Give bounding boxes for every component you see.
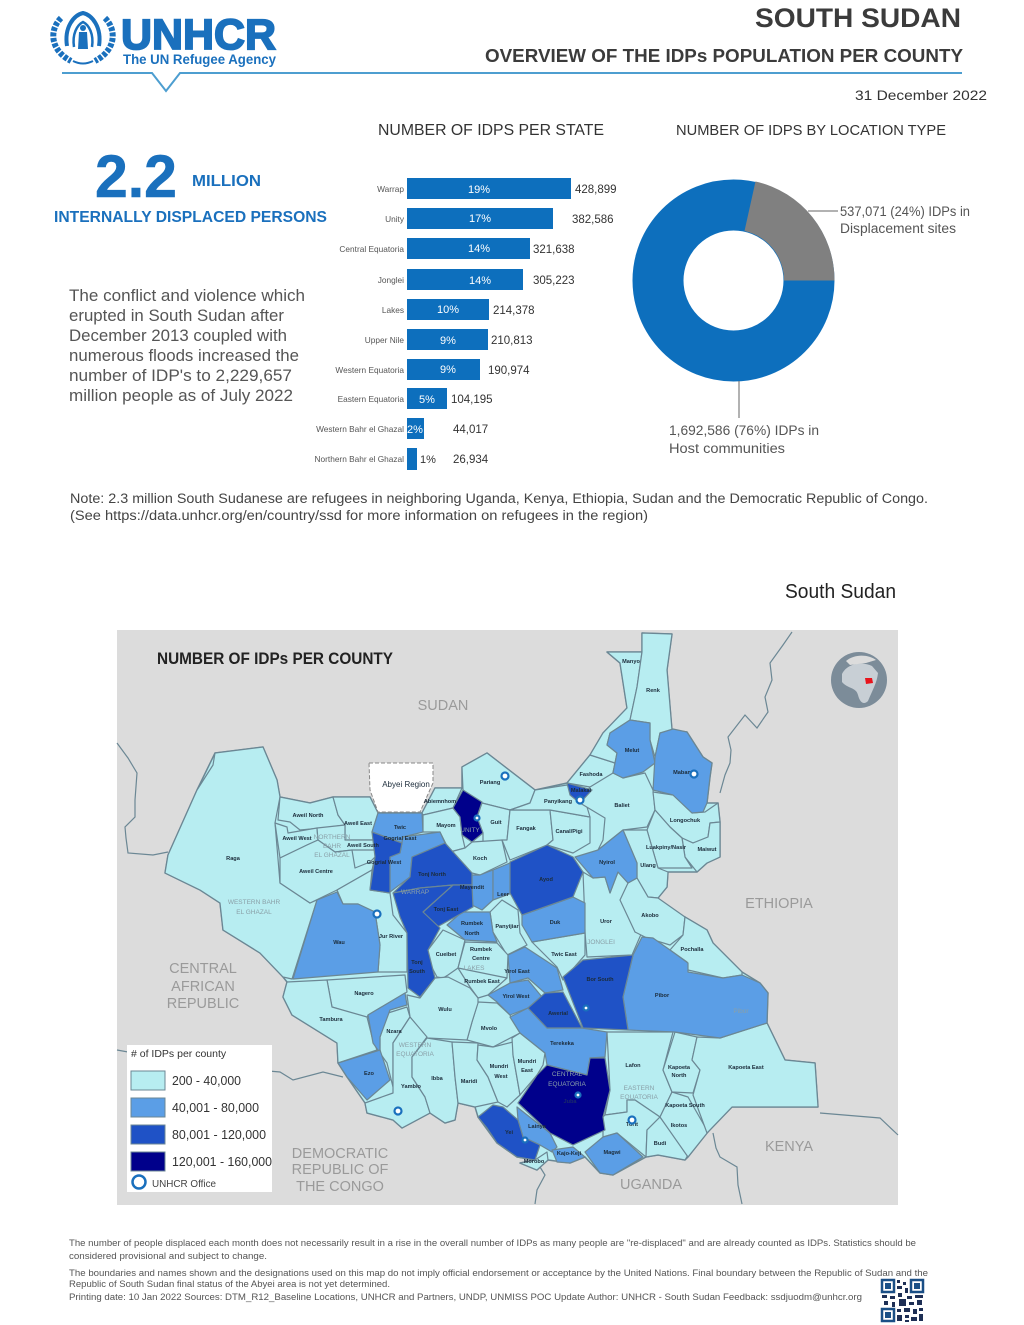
bar chart: IDPs per state: Unity: [385, 214, 405, 224]
title: South Sudan: SOUTH SUDAN: [755, 3, 961, 33]
note: refugees: (See https://data.unhcr.org/en/country/ssd for more information on refugees in the region): [70, 508, 648, 523]
note: refugees: Note: 2.3 million South Sudanese are refugees in neighboring Uganda, Kenya, Ethiopia, Sudan and the Democratic Republic of Congo.: [70, 491, 928, 506]
text block: context paragraph: The conflict and violence which: [69, 287, 305, 305]
county labels: Kapoeta: [668, 1065, 691, 1071]
footer disclaimer: considered provisional and subject to change.: [69, 1251, 267, 1261]
bar chart: IDPs per state: Upper Nile: [365, 335, 404, 345]
county labels: Aweil South: [347, 843, 380, 849]
state labels: LAKES: [464, 965, 485, 972]
county labels: Rumbek: [461, 921, 484, 927]
county labels: Tonj East: [434, 907, 459, 913]
county labels: Ulang: [640, 863, 656, 869]
county labels: Bor South: [586, 977, 614, 983]
county labels: Ikotos: [671, 1123, 687, 1129]
bar chart: IDPs per state: 14%: [469, 275, 491, 287]
text block: context paragraph: million people as of July 2022: [69, 387, 293, 405]
county labels: Twic East: [551, 952, 577, 958]
county labels: Gogrial East: [384, 836, 417, 842]
county labels: Kapoeta South: [665, 1103, 705, 1109]
text block: context paragraph: numerous floods increased the: [69, 347, 299, 365]
county labels: Rumbek East: [464, 979, 500, 985]
state labels: EQUATORIA: [548, 1081, 587, 1088]
map title: NUMBER OF IDPs PER COUNTY: [157, 649, 394, 668]
logo wordmark: UNHCR: [121, 11, 276, 59]
state labels: UNITY: [460, 827, 480, 834]
county labels: Luakpiny/Nasir: [646, 845, 687, 851]
county labels: Aweil North: [293, 813, 324, 819]
county labels: Tambura: [319, 1017, 343, 1023]
note: refugees: [70, 491, 928, 523]
county labels: Canal/Pigi: [555, 829, 583, 835]
county labels: North: [672, 1073, 687, 1079]
date: 31 December 2022: [855, 87, 987, 103]
county labels: Akobo: [641, 913, 659, 919]
county labels: Mayom: [436, 823, 456, 829]
county labels: Duk: [550, 920, 561, 926]
bar chart: IDPs per state: 104,195: [451, 394, 493, 406]
logo tagline: The UN Refugee Agency: [123, 52, 276, 67]
county labels: Pariang: [480, 780, 501, 786]
county labels: Terekeka: [550, 1041, 575, 1047]
county labels: Aweil Centre: [299, 869, 333, 875]
county labels: Twic: [394, 825, 406, 831]
county labels: North: [465, 931, 480, 937]
state labels: JONGLEI: [587, 939, 615, 946]
county labels: Lafon: [625, 1063, 641, 1069]
bar chart: IDPs per state: 190,974: [488, 365, 530, 377]
Abyei region: [369, 763, 433, 812]
legend labels: 200 - 40,000: [172, 1074, 241, 1088]
state labels: CENTRAL: [552, 1071, 583, 1078]
legend title: # of IDPs per county: [131, 1048, 227, 1060]
map caption: South Sudan: [785, 581, 896, 603]
county labels: Guit: [490, 820, 502, 826]
county labels: Panyikang: [544, 799, 573, 805]
county labels: Ibba: [431, 1076, 444, 1082]
text block: context paragraph: number of IDP's to 2,229,657: [69, 367, 292, 385]
bar chart: IDPs per state: 210,813: [491, 335, 533, 347]
legend labels: 80,001 - 120,000: [172, 1128, 266, 1142]
legend: [127, 1045, 272, 1192]
UNHCR office markers: [374, 770, 698, 1142]
million label: MILLION: [192, 173, 261, 190]
county labels: South: [409, 969, 425, 975]
country labels: DEMOCRATIC: [292, 1146, 388, 1162]
bar chart: IDPs per state: 305,223: [533, 275, 575, 287]
bar chart: IDPs per state: 14%: [468, 243, 490, 255]
callout: host communities: 1,692,586 (76%) IDPs in: [669, 423, 819, 438]
county labels: Fangak: [516, 826, 537, 832]
county labels: Kapoeta East: [728, 1065, 764, 1071]
county labels: Maiwut: [698, 847, 717, 853]
bar chart: IDPs per state: Lakes: [382, 305, 404, 315]
bar chart: IDPs per state: 10%: [437, 304, 459, 316]
bar chart: IDPs per state: 9%: [440, 335, 456, 347]
county labels: Nzara: [386, 1029, 402, 1035]
county labels: Yei: [505, 1130, 513, 1136]
state labels: WESTERN BAHR: [228, 899, 280, 906]
county labels: Jur River: [379, 934, 404, 940]
legend labels: [172, 1074, 272, 1169]
text block: context paragraph: [69, 287, 305, 405]
county labels: Raga: [226, 856, 241, 862]
state labels: WARRAP: [401, 889, 429, 896]
international borders: [117, 632, 898, 1204]
county labels: Maridi: [461, 1079, 478, 1085]
darkest counties: 120,001 - 160,000: [453, 790, 610, 1145]
county labels: Mvolo: [481, 1026, 498, 1032]
panel: map of IDPs per county: [117, 630, 898, 1205]
bar chart: IDPs per state: 214,378: [493, 305, 535, 317]
country labels: UGANDA: [620, 1177, 682, 1193]
footer disclaimer: Republic of South Sudan final status of the Abyei area is not yet determined.: [69, 1279, 390, 1289]
heading: IDPs by location type: NUMBER OF IDPS BY LOCATION TYPE: [676, 123, 946, 139]
country labels: CENTRAL: [169, 961, 237, 977]
county labels: West: [494, 1074, 508, 1080]
big number: 2.2: [95, 143, 177, 210]
text block: context paragraph: December 2013 coupled with: [69, 327, 287, 345]
bar chart: IDPs per state: Western Bahr el Ghazal: [316, 424, 404, 434]
county labels: Rumbek: [470, 947, 493, 953]
county labels: Gogrial West: [367, 860, 401, 866]
callout: displacement sites: 537,071 (24%) IDPs in: [840, 204, 970, 219]
country labels: THE CONGO: [296, 1179, 384, 1195]
county labels: Tonj: [411, 960, 423, 966]
county labels: Nyirol: [599, 860, 615, 866]
state labels: EQUATORIA: [620, 1094, 659, 1101]
map background: [117, 630, 898, 1205]
bar chart: IDPs per state: 19%: [468, 184, 490, 196]
text block: context paragraph: erupted in South Sudan after: [69, 307, 285, 325]
heading: IDPs per state: NUMBER OF IDPS PER STATE: [378, 122, 604, 139]
bar chart: IDPs per state: Northern Bahr el Ghazal: [315, 454, 404, 464]
county labels: Manyo: [622, 659, 640, 665]
bar chart: IDPs per state: Warrap: [377, 184, 404, 194]
county labels: Lainya: [528, 1124, 547, 1130]
state labels: EL GHAZAL: [236, 909, 272, 916]
subtitle: OVERVIEW OF THE IDPs POPULATION PER COUNTY: [485, 46, 963, 66]
country labels: SUDAN: [418, 698, 468, 714]
state labels: EQUATORIA: [396, 1051, 435, 1058]
icon: globe locator: [831, 652, 887, 708]
bar chart: IDPs per state: 1%: [420, 454, 436, 466]
bar chart: IDPs per state: 5%: [419, 394, 435, 406]
county labels: Yirol East: [504, 969, 530, 975]
county labels: Yirol West: [502, 994, 530, 1000]
county labels: Wau: [333, 940, 345, 946]
county labels: Panyijiar: [495, 924, 519, 930]
bar chart: IDPs per state: Eastern Equatoria: [338, 394, 404, 404]
callout: host communities: [669, 423, 819, 456]
state labels: WESTERN: [399, 1042, 432, 1049]
county labels: Pochalla: [680, 947, 704, 953]
dark counties: 80,001 - 120,000: [370, 783, 633, 1160]
county labels: Aweil West: [282, 836, 312, 842]
county labels: Centre: [472, 956, 490, 962]
country labels: ETHIOPIA: [745, 896, 813, 912]
subheading: INTERNALLY DISPLACED PERSONS: [54, 209, 327, 226]
bar chart: IDPs per state: Central Equatoria: [339, 244, 404, 254]
country labels: [167, 698, 813, 1195]
bar chart: IDPs per state: Western Equatoria: [335, 365, 404, 375]
county labels: Cueibet: [436, 952, 456, 958]
county labels: Mundri: [490, 1064, 509, 1070]
county labels: Maban: [673, 770, 691, 776]
header: UNHCR logo: [53, 11, 276, 67]
mid counties: 40,001 - 80,000: [293, 720, 768, 1175]
bar chart: IDPs per state: 26,934: [453, 454, 489, 466]
county labels: Tonj North: [418, 872, 447, 878]
South Sudan silhouette: [165, 633, 818, 1175]
county labels: Aweil East: [344, 821, 372, 827]
county labels: East: [521, 1068, 533, 1074]
country labels: REPUBLIC: [167, 996, 239, 1012]
county labels: Kajo-Keji: [557, 1151, 582, 1157]
counties: [165, 633, 818, 1175]
county labels: Morobo: [524, 1159, 545, 1165]
state labels: Pibor: [733, 1008, 749, 1015]
country labels: AFRICAN: [171, 979, 235, 995]
callout: displacement sites: Displacement sites: [840, 221, 956, 236]
county labels: Uror: [600, 919, 613, 925]
bar chart: IDPs per state: 9%: [440, 364, 456, 376]
county labels: Mundri: [518, 1059, 537, 1065]
county labels: [226, 659, 764, 1165]
county labels: Koch: [473, 856, 488, 862]
county labels: Leer: [497, 892, 510, 898]
header rule with notch: [62, 73, 962, 91]
light counties: 200 - 40,000: [165, 633, 818, 1170]
county labels: Torit: [626, 1122, 638, 1128]
bar chart: IDPs per state: Jonglei: [378, 275, 404, 285]
bar chart: IDPs per state: 2%: [407, 424, 423, 436]
footer disclaimer: [69, 1238, 928, 1302]
legend: UNHCR office: [132, 1176, 216, 1190]
county labels: Awerial: [548, 1011, 568, 1017]
icon: UNHCR emblem: [53, 13, 113, 64]
bar chart: IDPs per state: 321,638: [533, 244, 575, 256]
county labels: Abiemnhom: [424, 799, 456, 805]
state labels: EL GHAZAL: [314, 852, 350, 859]
state labels: NORTHERN: [314, 834, 351, 841]
bar chart: IDPs per state: 44,017: [453, 424, 488, 436]
state labels: EASTERN: [624, 1085, 655, 1092]
county labels: Budi: [654, 1141, 667, 1147]
callout: host communities: Host communities: [669, 441, 785, 456]
footer disclaimer: The number of people displaced each month does not necessarily result in a rise in the overall number of IDPs as many people are "re-displaced" and are already counted as IDPs. Statistics should be: [69, 1238, 916, 1248]
county labels: Nagero: [354, 991, 374, 997]
legend labels: 40,001 - 80,000: [172, 1101, 259, 1115]
bar chart: IDPs per state: 428,899: [575, 184, 617, 196]
county labels: Abyei Region: [382, 780, 430, 789]
county labels: Juba: [563, 1099, 577, 1105]
county labels: Malakal: [571, 788, 592, 794]
county labels: Baliet: [614, 803, 630, 809]
county labels: Ezo: [364, 1071, 375, 1077]
icon: QR code: [881, 1279, 924, 1322]
bar chart: IDPs per state: 382,586: [572, 214, 614, 226]
county labels: Longochuk: [670, 818, 701, 824]
legend labels: 120,001 - 160,000: [172, 1155, 272, 1169]
legend items: [131, 1071, 165, 1171]
footer disclaimer: The boundaries and names shown and the designations used on this map do not imply official endorsement or acceptance by the United Nations. Final boundary between the Republic of Sudan and the: [69, 1268, 928, 1278]
legend: UNHCR office: UNHCR Office: [152, 1179, 216, 1190]
key figure: 2.2 million IDPs: [54, 143, 327, 226]
footer disclaimer: Printing date: 10 Jan 2022 Sources: DTM_R12_Baseline Locations, UNHCR and Partners, UNDP, UNMISS POC Update Author: UNHCR - South Sudan Feedback: ssdjuodm@unhcr.org: [69, 1292, 862, 1302]
county labels: Magwi: [603, 1150, 621, 1156]
bar chart: IDPs per state: 17%: [469, 213, 491, 225]
county labels: Yambio: [401, 1084, 422, 1090]
county labels: Melut: [625, 748, 639, 754]
state labels: [228, 827, 749, 1101]
county labels: Pibor: [655, 993, 670, 999]
county labels: Renk: [646, 688, 661, 694]
county labels: Ayod: [539, 877, 553, 883]
state labels: BAHR: [323, 843, 341, 850]
country labels: REPUBLIC OF: [292, 1162, 388, 1178]
county labels: Mayendit: [460, 885, 484, 891]
country labels: KENYA: [765, 1139, 813, 1155]
donut chart: location type: [658, 182, 838, 418]
callout: displacement sites: [840, 204, 970, 236]
county labels: Fashoda: [579, 772, 603, 778]
bar chart: IDPs per state: [315, 178, 617, 470]
county labels: Wulu: [438, 1007, 452, 1013]
